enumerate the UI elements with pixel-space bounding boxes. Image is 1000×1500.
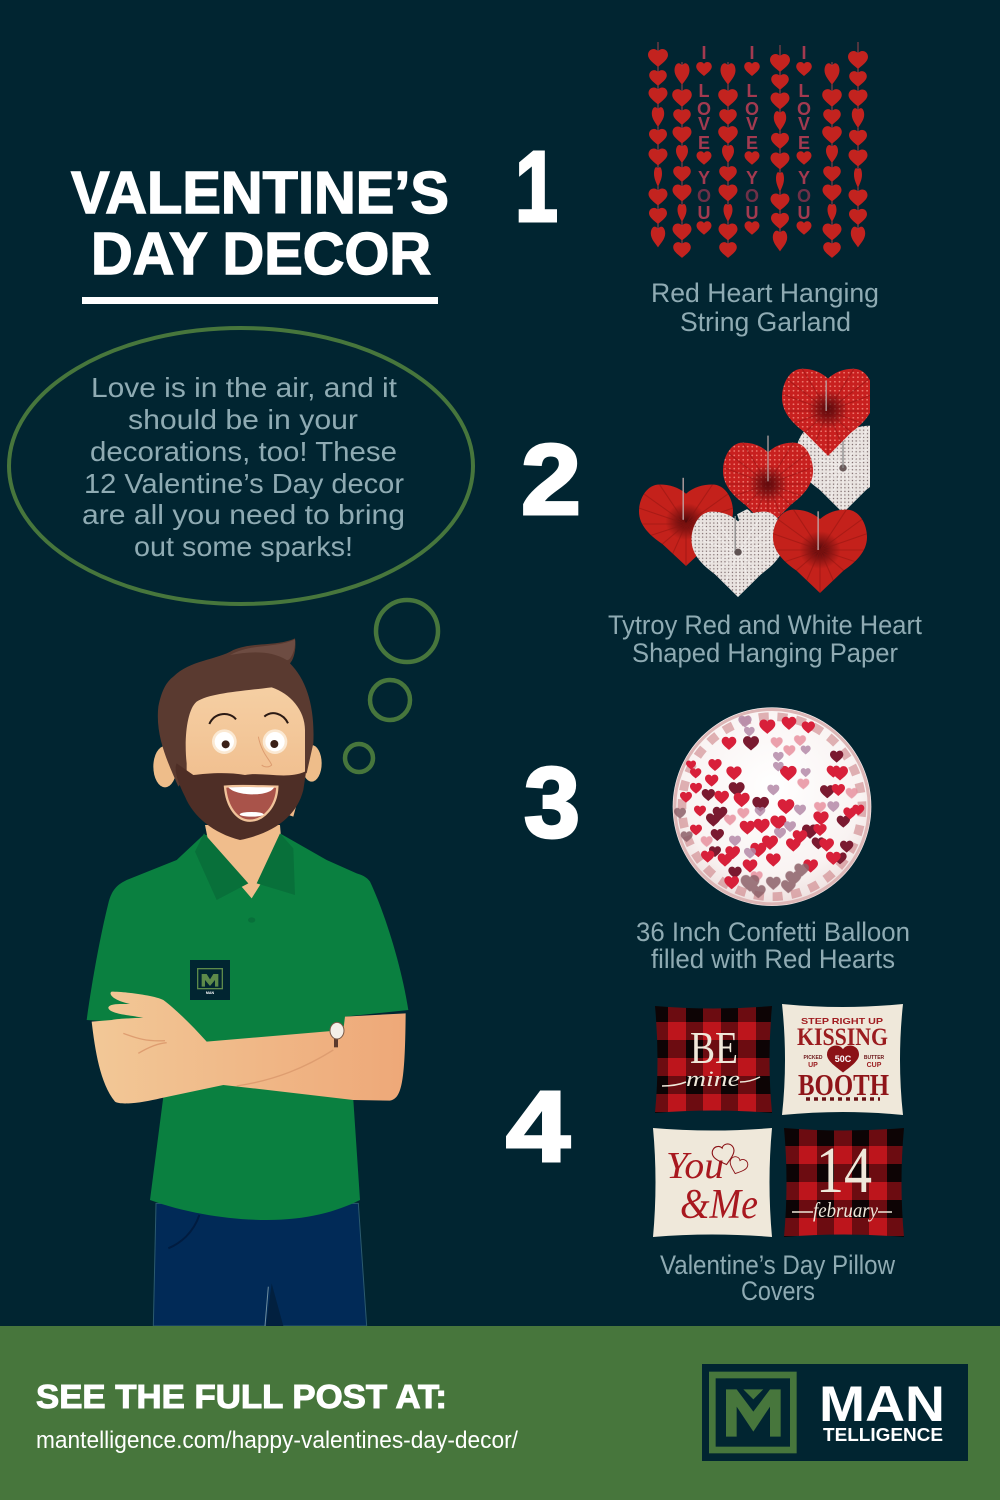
- garland letters: I LOVE YOU: L: [746, 81, 758, 101]
- thought bubble: [9, 328, 473, 604]
- pillow: Kissing Booth: BUTTER: [864, 1055, 885, 1061]
- garland letters: I LOVE YOU: V: [798, 114, 810, 134]
- caption 2: Shaped Hanging Paper: [632, 638, 898, 668]
- fan heart: solid red left: [639, 478, 733, 566]
- pillow: You & Me: [653, 1128, 772, 1237]
- caption 1: Red Heart Hanging: [651, 278, 879, 308]
- thought bubble text: 12 Valentine’s Day decor: [84, 468, 404, 499]
- caption 4: Valentine’s Day Pillow: [660, 1250, 895, 1280]
- fan heart: white right: [798, 426, 870, 510]
- man body: [87, 825, 408, 1326]
- caption 3: [636, 917, 910, 974]
- garland letters: I LOVE YOU: U: [798, 203, 810, 223]
- fan heart: dotted red top: [782, 368, 870, 456]
- pillow: Kissing Booth: UP: [808, 1062, 818, 1069]
- shirt logo badge: MAN: [206, 991, 215, 995]
- garland letters: I LOVE YOU: Y: [746, 168, 758, 188]
- caption 1: [651, 278, 879, 337]
- garland letters: I LOVE YOU: L: [798, 81, 810, 101]
- item 1: red heart garland: [648, 42, 868, 258]
- thought bubble text: out some sparks!: [134, 531, 353, 562]
- shirt logo badge: [190, 960, 230, 1000]
- garland letters: I LOVE YOU: O: [797, 186, 811, 206]
- Mantelligence logo: MAN: [819, 1376, 945, 1432]
- pillow: You & Me: &Me: [680, 1182, 758, 1228]
- garland letters: I LOVE YOU: U: [698, 203, 710, 223]
- item 3: confetti balloon: [673, 707, 871, 906]
- number 3: 3: [524, 747, 580, 859]
- garland letters: I LOVE YOU: V: [698, 114, 710, 134]
- number 2: 2: [521, 424, 581, 536]
- garland letters: I LOVE YOU: E: [798, 133, 810, 153]
- garland letters: I LOVE YOU: O: [697, 186, 711, 206]
- garland letters: I LOVE YOU: I: [749, 43, 755, 63]
- garland letters: I LOVE YOU: O: [697, 99, 711, 119]
- pillow: Kissing Booth: [782, 1004, 903, 1115]
- footer band: [0, 1326, 1000, 1500]
- title: [71, 160, 449, 304]
- caption 4: Covers: [741, 1276, 815, 1306]
- caption 2: [608, 610, 922, 668]
- garland letters: I LOVE YOU: Y: [698, 168, 710, 188]
- thought bubble text: should be in your: [128, 404, 358, 435]
- pillow: Be mine: BE: [690, 1022, 738, 1073]
- pillow: Be mine: mine: [686, 1066, 740, 1091]
- garland letters: I LOVE YOU: I: [701, 43, 707, 63]
- garland letters: I LOVE YOU: V: [746, 114, 758, 134]
- caption 3: 36 Inch Confetti Balloon: [636, 917, 910, 947]
- footer url: mantelligence.com/happy-valentines-day-decor/: [36, 1427, 518, 1454]
- man head: [153, 638, 322, 840]
- pillow: 14 February: february: [813, 1198, 879, 1222]
- garland letters: I LOVE YOU: I: [801, 43, 807, 63]
- pillow: Kissing Booth: PICKED: [804, 1055, 823, 1061]
- garland letters: I LOVE YOU: O: [745, 186, 759, 206]
- caption 1: String Garland: [680, 307, 851, 337]
- footer heading: SEE THE FULL POST AT:: [36, 1378, 447, 1415]
- pillow: You & Me: You: [666, 1145, 724, 1187]
- pillow: Kissing Booth: KISSING: [797, 1024, 888, 1051]
- character: man with crossed arms: [87, 638, 408, 1326]
- thought bubble text: [82, 372, 405, 562]
- garland letters: I LOVE YOU: O: [797, 99, 811, 119]
- pillow: Kissing Booth: STEP RIGHT UP: [801, 1016, 883, 1026]
- fan heart: dotted red middle: [723, 436, 813, 518]
- garland letters: I LOVE YOU: U: [746, 203, 758, 223]
- item 2: paper fan hearts: [639, 368, 870, 597]
- number 1: 1: [515, 131, 558, 243]
- garland letters: I LOVE YOU: L: [698, 81, 710, 101]
- thought trail circles: [345, 600, 438, 772]
- title: DAY DECOR: [91, 221, 431, 287]
- caption 2: Tytroy Red and White Heart: [608, 610, 922, 640]
- fan heart: solid red bottom right: [773, 510, 867, 593]
- garland letters: I LOVE YOU: Y: [798, 168, 810, 188]
- fan heart: white bottom: [692, 509, 780, 597]
- garland letters: I LOVE YOU: [697, 43, 811, 223]
- garland letters: I LOVE YOU: E: [698, 133, 710, 153]
- caption 3: filled with Red Hearts: [651, 944, 895, 974]
- item 4: pillow covers: [653, 1004, 904, 1237]
- thought bubble text: Love is in the air, and it: [91, 372, 397, 403]
- Mantelligence logo: [702, 1364, 968, 1461]
- pillow: 14 February: 14: [816, 1134, 872, 1207]
- pillow: Kissing Booth: 50C: [835, 1054, 852, 1064]
- pillow: Be mine: [655, 1006, 772, 1113]
- garland letters: I LOVE YOU: E: [746, 133, 758, 153]
- garland letters: I LOVE YOU: O: [745, 99, 759, 119]
- number 4: 4: [506, 1071, 570, 1183]
- pillow: Kissing Booth: CUP: [867, 1062, 882, 1069]
- pillow: 14 February: [784, 1128, 904, 1237]
- pillow: Kissing Booth: BOOTH: [798, 1067, 889, 1102]
- thought bubble text: are all you need to bring: [82, 499, 405, 530]
- caption 4: [660, 1250, 895, 1306]
- title: VALENTINE’S: [71, 160, 449, 226]
- Mantelligence logo: TELLIGENCE: [823, 1425, 943, 1445]
- thought bubble text: decorations, too! These: [90, 436, 397, 467]
